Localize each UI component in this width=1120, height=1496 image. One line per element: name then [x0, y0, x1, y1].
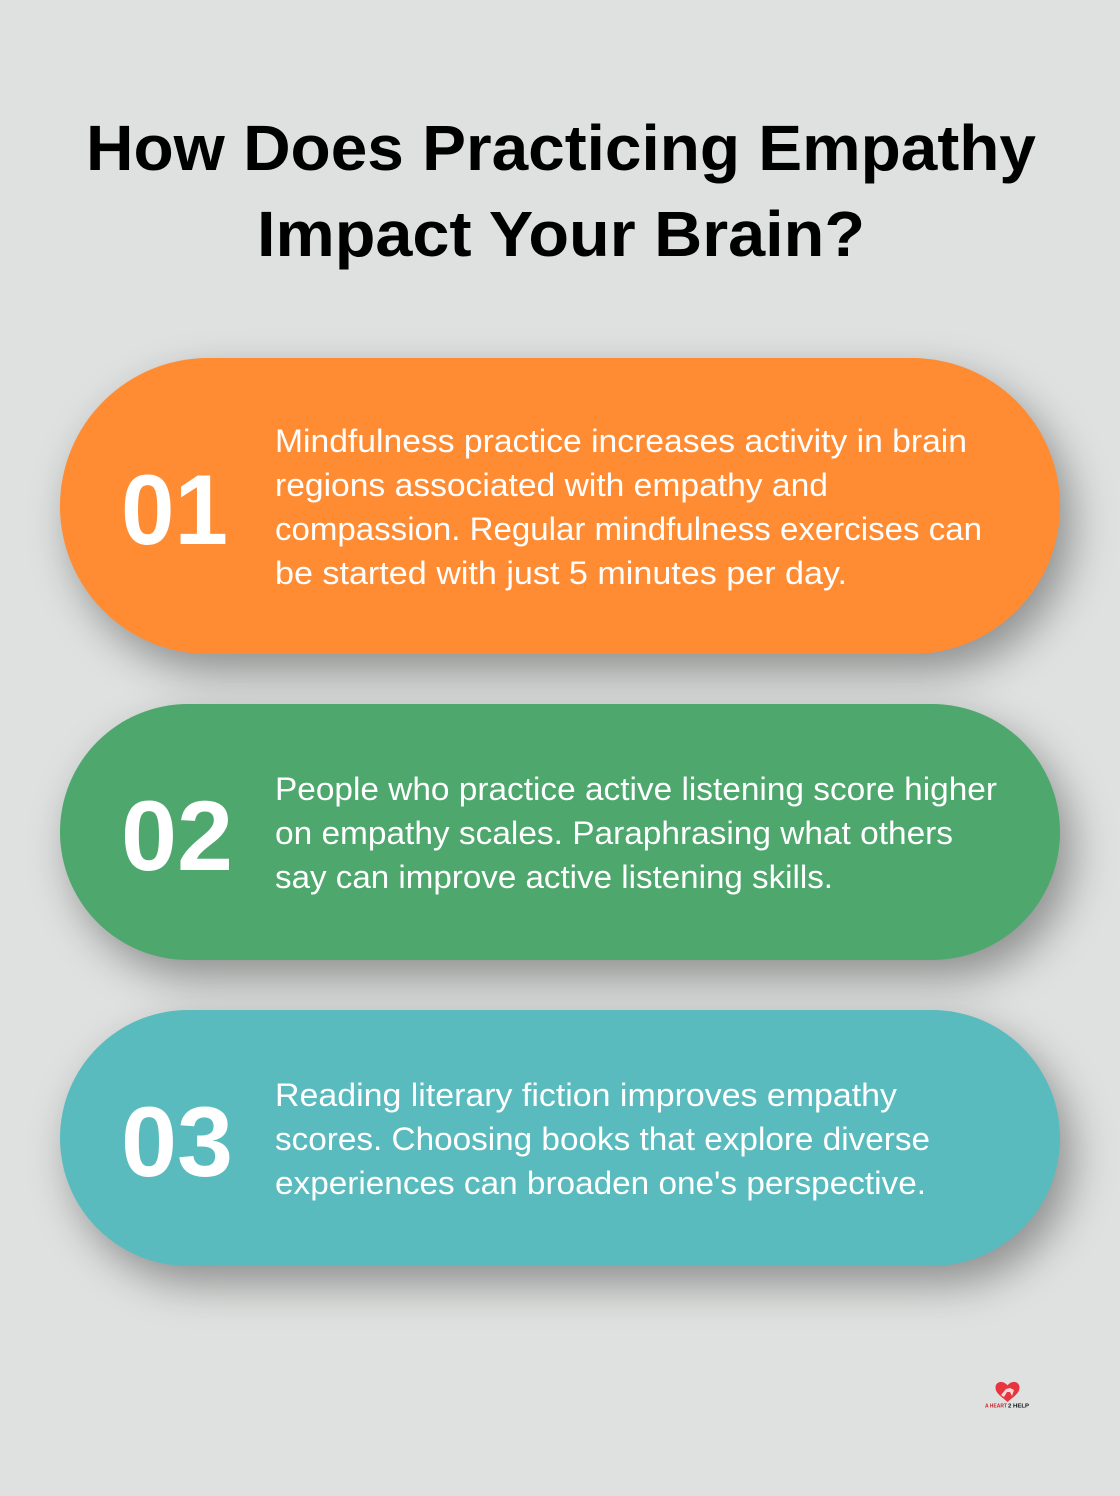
title: Impact Your Brain? — [257, 198, 865, 270]
text block: mindfulness: Mindfulness practice increases activity in brain — [275, 423, 967, 459]
icon: A Heart 2 Help logo: 2 HELP — [1008, 1404, 1029, 1410]
number 01: 01 — [121, 454, 228, 565]
icon: A Heart 2 Help logo — [985, 1382, 1029, 1410]
number 02: 02 — [121, 780, 233, 891]
text block: mindfulness — [275, 423, 982, 591]
text block: mindfulness: compassion. Regular mindfulness exercises can — [275, 511, 982, 547]
text block: literary fiction — [275, 1077, 930, 1201]
text block: active listening: say can improve active listening skills. — [275, 859, 833, 895]
text block: literary fiction: scores. Choosing books that explore diverse — [275, 1121, 930, 1157]
text block: literary fiction: experiences can broaden one's perspective. — [275, 1165, 926, 1201]
text block: mindfulness: regions associated with empathy and — [275, 467, 828, 503]
text block: active listening: People who practice active listening score higher — [275, 771, 997, 807]
panel: step 03 literary fiction — [60, 1010, 1060, 1266]
panel: step 01 mindfulness — [60, 358, 1060, 654]
text block: mindfulness: be started with just 5 minutes per day. — [275, 555, 847, 591]
number 03: 03 — [121, 1086, 233, 1197]
panel: step 02 active listening — [60, 704, 1060, 960]
text block: active listening — [275, 771, 997, 895]
title — [86, 112, 1036, 270]
icon: A Heart 2 Help logo: A HEART — [985, 1404, 1008, 1410]
text block: active listening: on empathy scales. Paraphrasing what others — [275, 815, 953, 851]
text block: literary fiction: Reading literary fiction improves empathy — [275, 1077, 897, 1113]
title: How Does Practicing Empathy — [86, 112, 1036, 184]
